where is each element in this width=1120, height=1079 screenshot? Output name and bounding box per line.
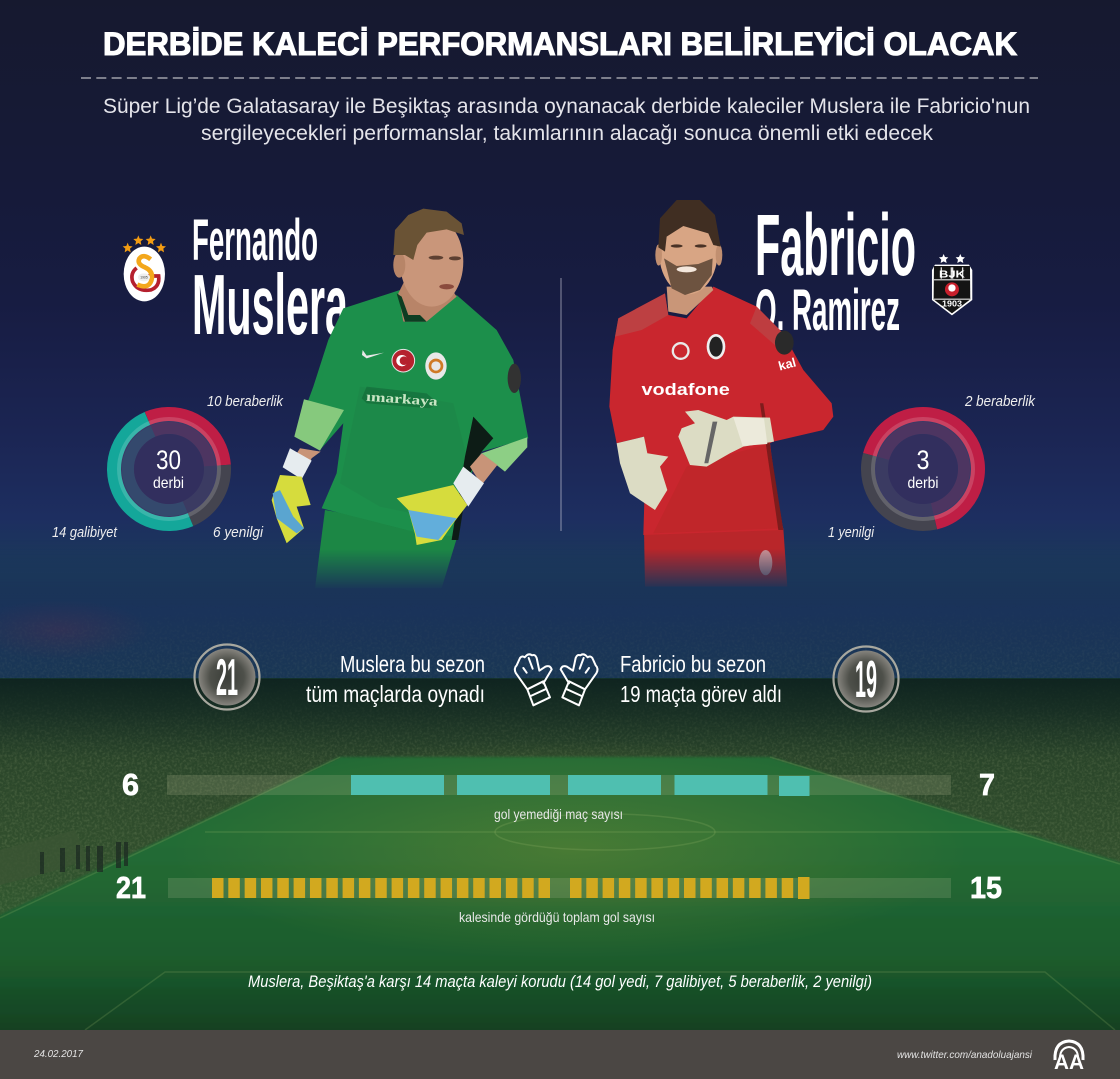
neck bbox=[398, 280, 457, 322]
infographic canvas: Fabricio bbox=[755, 197, 916, 294]
donut chart: Fabricio derbies bbox=[856, 402, 990, 536]
text: Fabricio season: 19 maçta görev aldı bbox=[620, 681, 782, 707]
photo: Muslera illustration: ımarkaya bbox=[366, 389, 439, 409]
name: Fernando Muslera: Fernando bbox=[192, 208, 318, 273]
icon: Besiktas logo: 1903 bbox=[942, 300, 963, 309]
badge: Fabricio 19 matches bbox=[834, 646, 898, 712]
subtitle bbox=[103, 95, 1030, 145]
text: Muslera season: tüm maçlarda oynadı bbox=[306, 681, 485, 707]
photo: Fabricio illustration: vodafone bbox=[641, 380, 730, 399]
donut labels: Fabricio: 2 beraberlik bbox=[964, 393, 1036, 410]
donut labels: Muslera bbox=[52, 393, 284, 541]
photo: Fabricio illustration bbox=[609, 200, 833, 587]
underarm shadow bbox=[452, 417, 493, 540]
gloves bbox=[272, 475, 311, 543]
photo: Fabricio illustration: kal bbox=[777, 355, 798, 373]
icon: Besiktas logo bbox=[932, 254, 972, 315]
bar chart: clean sheets: 7 bbox=[979, 767, 995, 802]
face bbox=[659, 209, 718, 294]
footer bar: www.twitter.com/anadoluajansi bbox=[897, 1049, 1033, 1061]
icon: Anadolu Agency logo bbox=[1054, 1041, 1084, 1074]
jersey bbox=[295, 290, 528, 537]
text: Muslera season bbox=[306, 651, 485, 707]
gloves bbox=[678, 410, 774, 467]
title: DERBİDE KALECİ PERFORMANSLARI BELİRLEYİCİ OLACAK bbox=[103, 26, 1017, 62]
bar chart: clean sheets: gol yemediği maç sayısı bbox=[494, 806, 623, 822]
donut chart: Fabricio derbies: 3 bbox=[916, 445, 930, 475]
sleeve cuffs bbox=[294, 399, 344, 451]
text: Fabricio season: Fabricio bu sezon bbox=[620, 651, 766, 677]
icon: Anadolu Agency logo: AA bbox=[1054, 1051, 1084, 1074]
icon: Besiktas logo: BJK bbox=[939, 269, 966, 280]
icon: Galatasaray logo bbox=[123, 235, 166, 301]
donut chart: Muslera derbies bbox=[97, 397, 241, 541]
badges bbox=[362, 350, 384, 358]
text: Fabricio season bbox=[620, 651, 782, 707]
wristbands bbox=[283, 448, 312, 479]
name: Fernando Muslera bbox=[192, 208, 348, 353]
face bbox=[400, 217, 463, 307]
donut labels: Muslera: 10 beraberlik bbox=[207, 393, 284, 410]
forearms bbox=[297, 448, 320, 474]
badges bbox=[672, 342, 690, 360]
bar chart: clean sheets: 6 bbox=[122, 767, 139, 802]
donut labels: Muslera: 14 galibiyet bbox=[52, 524, 118, 541]
badge: Muslera 21 matches bbox=[194, 644, 260, 710]
infographic canvas: Muslera bbox=[192, 258, 348, 353]
donut chart: Muslera derbies: 30 bbox=[156, 445, 181, 475]
bench and pitchside figures bbox=[0, 830, 128, 885]
hair bbox=[658, 200, 721, 252]
neck bbox=[667, 287, 713, 315]
photo: Muslera illustration bbox=[272, 209, 528, 588]
bar chart: goals conceded: 21 bbox=[116, 870, 146, 905]
footnote: Muslera, Beşiktaş'a karşı 14 maçta kaleyi korudu (14 gol yedi, 7 galibiyet, 5 beraberlik, 2 yenilgi) bbox=[248, 972, 872, 991]
badge: Muslera 21 matches: 21 bbox=[216, 649, 238, 707]
donut labels: Fabricio: 1 yenilgi bbox=[828, 524, 875, 541]
badge: Fabricio 19 matches: 19 bbox=[855, 651, 877, 709]
hair bbox=[393, 209, 464, 260]
background: night sky and stadium bbox=[0, 213, 1120, 1030]
donut labels: Muslera: 6 yenilgi bbox=[213, 524, 264, 541]
donut labels: Fabricio bbox=[828, 393, 1036, 541]
name: Fabricio O. Ramirez bbox=[755, 197, 916, 343]
jersey bbox=[609, 287, 833, 535]
shorts bbox=[315, 510, 458, 588]
footer bar bbox=[0, 1030, 1120, 1079]
donut chart: Fabricio derbies: derbi bbox=[908, 475, 938, 492]
footer bar: 24.02.2017 bbox=[33, 1048, 84, 1060]
bar chart: goals conceded: kalesinde gördüğü toplam gol sayısı bbox=[459, 909, 655, 925]
bar chart: clean sheets bbox=[122, 767, 995, 822]
subtitle: Süper Lig’de Galatasaray ile Beşiktaş arasında oynanacak derbide kaleciler Muslera ile Fabricio'nun bbox=[103, 95, 1030, 118]
subtitle: sergileyecekleri performanslar, takımlarının alacağı sonuca önemli etki edecek bbox=[201, 122, 934, 145]
icon: goalkeeper gloves bbox=[515, 654, 598, 705]
shorts bbox=[644, 528, 787, 587]
icon: Galatasaray logo: 1905 bbox=[140, 276, 148, 280]
text: Muslera season: Muslera bu sezon bbox=[340, 651, 485, 677]
donut chart: Muslera derbies: derbi bbox=[153, 475, 184, 492]
name: Fabricio O. Ramirez: O. Ramirez bbox=[755, 278, 900, 343]
bar chart: goals conceded: 15 bbox=[970, 870, 1002, 905]
bar chart: goals conceded bbox=[116, 870, 1002, 925]
